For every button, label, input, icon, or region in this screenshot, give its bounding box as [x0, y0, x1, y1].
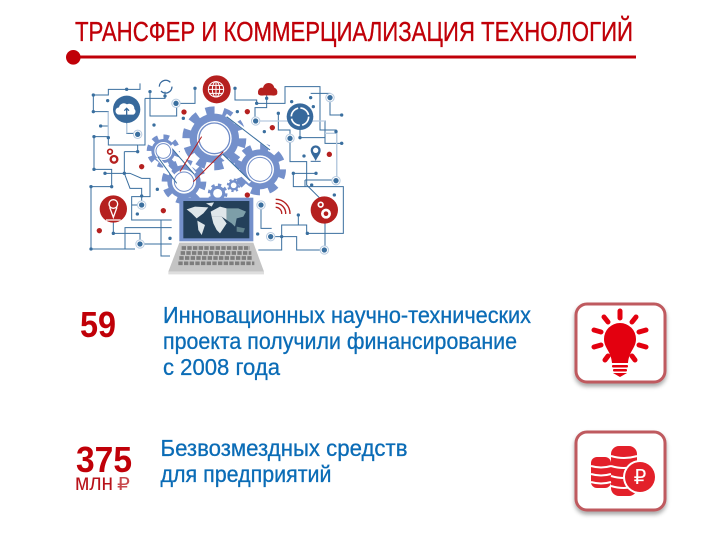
world map — [187, 202, 246, 235]
text: innovative projects: проекта получили финансирование — [163, 328, 517, 354]
stat: 375 million rubles: млн — [75, 469, 113, 495]
stat: 375 million rubles: 375 — [76, 439, 132, 480]
icon: cloud upload — [113, 96, 140, 123]
gear belts — [154, 115, 274, 194]
icon: blue location pin — [311, 145, 321, 161]
icon: refresh — [159, 80, 172, 93]
stat: 375 million rubles: ₽ — [117, 474, 130, 495]
technology illustration — [89, 75, 343, 274]
text: grant funds: Безвозмездных средств — [160, 435, 408, 461]
text: grant funds: для предприятий — [160, 461, 332, 487]
icon card: light bulb — [576, 304, 665, 382]
text: innovative projects: с 2008 года — [163, 354, 280, 380]
icon: red location pin — [100, 195, 127, 223]
icon: wifi signal — [276, 199, 290, 214]
icon: red cloud — [258, 83, 277, 96]
title underline with dot — [66, 50, 636, 65]
icon card: coins with ruble: ₽ — [634, 465, 647, 489]
ringed nodes — [133, 93, 341, 255]
text: innovative projects: Инновационных научно-технических — [163, 302, 531, 328]
icon card: coins with ruble — [576, 432, 665, 510]
icon: globe — [203, 75, 231, 103]
icon: gears circle — [311, 196, 338, 224]
red dots — [97, 109, 332, 233]
gears — [149, 110, 283, 202]
stat: 375 million rubles — [75, 439, 132, 495]
circuit nodes — [89, 87, 343, 251]
stat: 59: 59 — [80, 304, 116, 345]
circuit lines — [91, 83, 343, 256]
text: innovative projects — [163, 302, 531, 380]
icon: sync circle — [287, 103, 313, 130]
text: grant funds — [160, 435, 408, 487]
laptop — [168, 198, 264, 274]
icon: small red gears — [108, 149, 117, 163]
